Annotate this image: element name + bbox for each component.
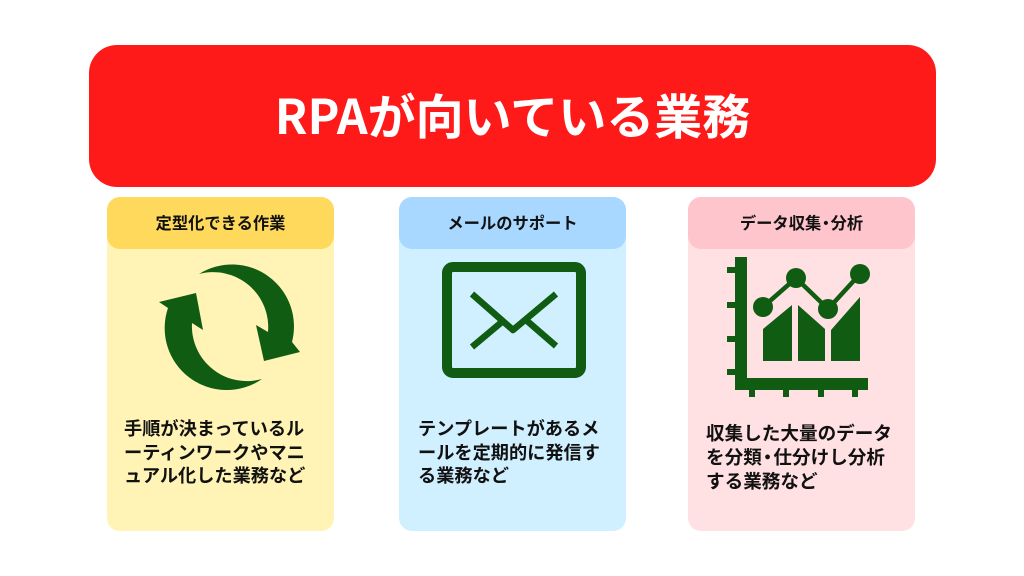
text: data analysis description	[706, 418, 892, 494]
icon: cycle arrows	[159, 265, 300, 390]
text: data analysis description: を分類・仕分けし分析	[706, 442, 885, 470]
heading: data analysis: データ収集・分析	[740, 210, 863, 234]
text: mail support description: ールを定期的に発信す	[418, 439, 600, 465]
heading: mail support: メールのサポート	[447, 210, 578, 234]
text: mail support description: る業務など	[418, 462, 509, 488]
text: routine work description: ーティンワークやマニ	[124, 439, 305, 465]
heading: routine work	[107, 197, 334, 249]
icon: analytics chart	[727, 257, 870, 397]
text: routine work description	[124, 415, 305, 488]
icon: envelope	[447, 267, 581, 373]
heading: data analysis	[688, 197, 915, 249]
heading: mail support	[399, 197, 626, 249]
text: data analysis description: する業務など	[706, 466, 818, 494]
text: mail support description: テンプレートがあるメ	[418, 415, 599, 441]
title banner	[89, 45, 936, 187]
text: routine work description: 手順が決まっているル	[124, 415, 304, 441]
panel: data analysis	[688, 197, 915, 531]
panel: routine work	[107, 197, 334, 531]
title banner: RPAが向いている業務	[275, 78, 750, 148]
text: mail support description	[418, 415, 600, 488]
text: routine work description: ュアル化した業務など	[124, 462, 305, 488]
panel: mail support	[399, 197, 626, 531]
text: data analysis description: 収集した大量のデータ	[706, 418, 892, 446]
heading: routine work: 定型化できる作業	[156, 210, 285, 234]
